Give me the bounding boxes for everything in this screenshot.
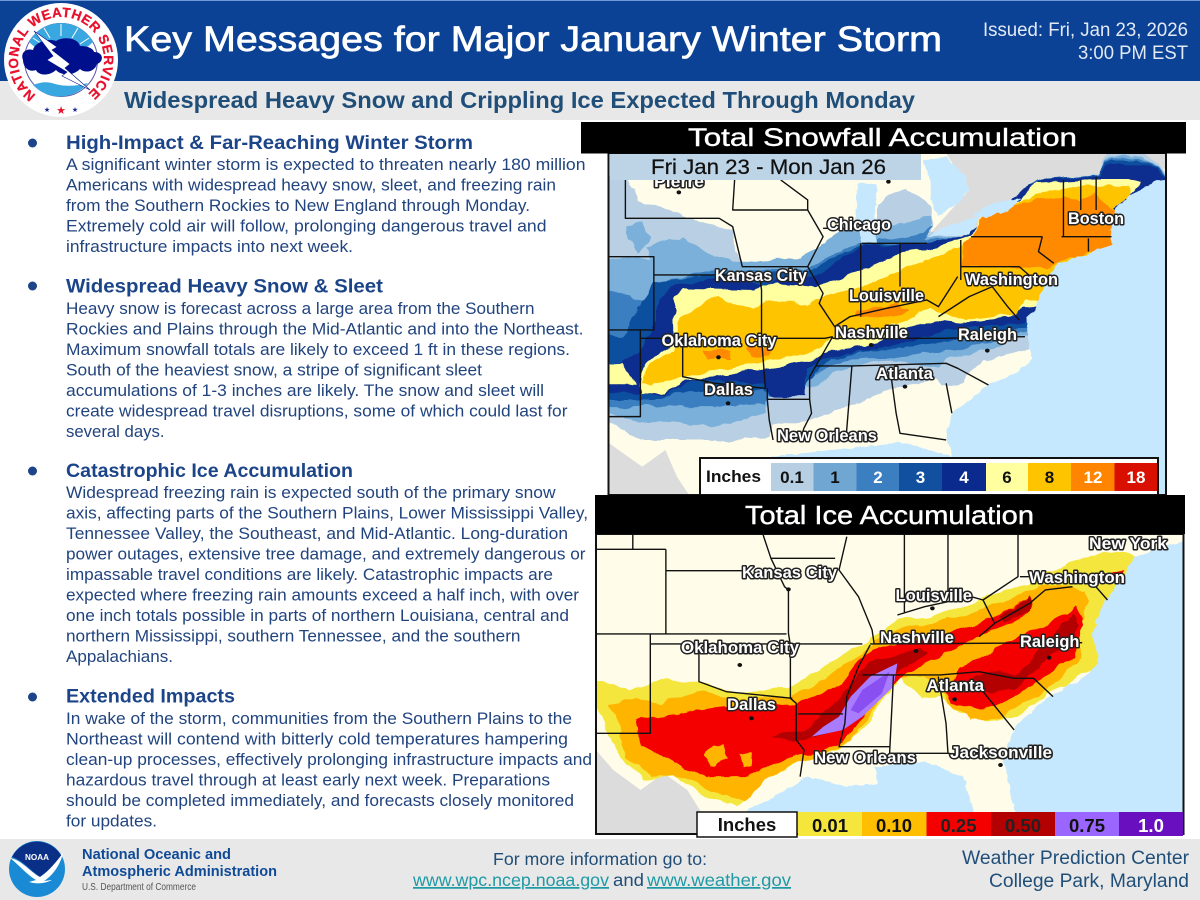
snowfall title bar xyxy=(581,122,1186,154)
section: high-impact winter storm: High-Impact & Far-Reaching Winter Storm xyxy=(66,132,473,154)
section: catastrophic ice accumulation: axis, affecting parts of the Southern Plains, Lower Mississippi Valley, xyxy=(66,504,588,522)
section: catastrophic ice accumulation: northern Mississippi, southern Tennessee, and the southern xyxy=(66,628,520,646)
section: widespread heavy snow and sleet: Maximum snowfall totals are likely to exceed 1 ft in these regions. xyxy=(66,341,570,359)
snowfall city labels: Oklahoma City xyxy=(662,332,777,350)
map frame xyxy=(608,153,1166,495)
ice city labels: Kansas City xyxy=(742,564,838,582)
snowfall legend: 12 xyxy=(1084,468,1102,487)
section: widespread heavy snow and sleet: Heavy snow is forecast across a large area from the Southern xyxy=(66,300,534,318)
snowfall legend: 3 xyxy=(916,468,925,487)
section: widespread heavy snow and sleet: several days. xyxy=(66,423,164,441)
ice legend: 1.0 xyxy=(1138,815,1164,836)
section: extended impacts: for updates. xyxy=(66,812,157,830)
icon: National Weather Service logo: ★ xyxy=(44,106,50,114)
subtitle bar xyxy=(0,81,1200,120)
ice legend: Inches xyxy=(718,814,776,835)
section: extended impacts: hazardous travel through at least early next week. Preparations xyxy=(66,772,550,790)
ice city labels: New York xyxy=(1089,535,1168,553)
Weather Prediction Center xyxy=(962,848,1190,892)
section: widespread heavy snow and sleet: South of the heaviest snow, a stripe of significant sleet xyxy=(66,362,483,380)
panel: key messages text xyxy=(28,132,592,830)
ice city labels: New Orleans xyxy=(814,749,916,767)
section: catastrophic ice accumulation: one inch totals possible in parts of northern Louisiana, central and xyxy=(66,607,569,625)
snowfall city labels: Atlanta xyxy=(876,365,934,383)
snowfall city labels: Raleigh xyxy=(958,326,1017,344)
section: extended impacts: should be completed immediately, and forecasts closely monitored xyxy=(66,792,574,810)
snowfall city labels: Dallas xyxy=(704,381,753,399)
ice legend xyxy=(697,812,1183,837)
date range box: Fri Jan 23 - Mon Jan 26 xyxy=(651,156,886,179)
section: catastrophic ice accumulation: expected where freezing rain amounts exceed a half inch, with over xyxy=(66,586,580,604)
section: catastrophic ice accumulation: Appalachians. xyxy=(66,648,173,666)
header banner xyxy=(0,0,1200,81)
issued date: 3:00 PM EST xyxy=(1078,43,1188,64)
ice city labels: Jacksonville xyxy=(950,744,1052,762)
snowfall city labels: New Orleans xyxy=(777,427,877,445)
more information links xyxy=(412,849,791,890)
section: widespread heavy snow and sleet: Rockies and Plains through the Mid-Atlantic and into the Northeast. xyxy=(66,320,584,338)
subtitle bar: Widespread Heavy Snow and Crippling Ice Expected Through Monday xyxy=(124,87,915,113)
stars: ★ xyxy=(56,105,66,117)
section: catastrophic ice accumulation: power outages, extensive tree damage, and extremely dangerous or xyxy=(66,546,586,564)
section: widespread heavy snow and sleet: Widespread Heavy Snow & Sleet xyxy=(66,276,384,298)
section: high-impact winter storm: Americans with widespread heavy snow, sleet, and freezing rain xyxy=(66,176,556,194)
Weather Prediction Center: College Park, Maryland xyxy=(989,871,1189,892)
ice city labels: Nashville xyxy=(880,629,954,647)
footer xyxy=(0,839,1200,900)
snowfall legend: 18 xyxy=(1127,468,1145,487)
issued date xyxy=(983,20,1188,64)
more information links: For more information go to: xyxy=(493,849,707,869)
section: catastrophic ice accumulation: impassable travel conditions are likely. Catastrophic impacts are xyxy=(66,566,553,584)
snowfall map artwork xyxy=(600,150,1185,507)
section: catastrophic ice accumulation: Catastrophic Ice Accumulation xyxy=(66,460,353,482)
section: widespread heavy snow and sleet: accumulations of 1-3 inches are likely. The snow and sleet will xyxy=(66,382,544,400)
icon: NOAA logo: NOAA xyxy=(25,853,49,862)
snowfall legend: 6 xyxy=(1002,468,1012,487)
section: extended impacts xyxy=(28,686,592,830)
ice map artwork xyxy=(590,533,1197,843)
ice city labels: Oklahoma City xyxy=(681,639,800,657)
section: high-impact winter storm xyxy=(28,132,586,256)
NOAA name: Atmospheric Administration xyxy=(82,864,277,880)
snowfall legend: 4 xyxy=(959,468,969,487)
snowfall legend: 2 xyxy=(873,468,883,487)
ice legend: 0.75 xyxy=(1069,815,1105,836)
snowfall legend xyxy=(700,458,1158,495)
NOAA name: U.S. Department of Commerce xyxy=(82,882,196,893)
section: widespread heavy snow and sleet: create widespread travel disruptions, some of which could last for xyxy=(66,402,568,420)
ice legend: 0.10 xyxy=(876,815,912,836)
section: extended impacts: Extended Impacts xyxy=(66,686,235,708)
NOAA name: National Oceanic and xyxy=(82,847,231,863)
section: extended impacts: clean-up processes, effectively prolonging infrastructure impacts and xyxy=(66,751,592,769)
panel: total ice map xyxy=(590,495,1197,843)
ring text: NATIONAL WEATHER SERVICE xyxy=(8,7,114,102)
snowfall legend: 8 xyxy=(1045,468,1054,487)
snowfall city labels: Nashville xyxy=(835,324,908,342)
ice legend: 0.01 xyxy=(812,815,848,836)
ice city labels: Raleigh xyxy=(1020,633,1080,651)
ice legend: 0.50 xyxy=(1005,815,1041,836)
ice city labels: Atlanta xyxy=(926,677,985,695)
section: catastrophic ice accumulation: Tennessee Valley, the Southeast, and Mid-Atlantic. Long-duration xyxy=(66,525,568,543)
section: high-impact winter storm: A significant winter storm is expected to threaten nearly 180 million xyxy=(66,156,586,174)
ice city labels xyxy=(681,535,1168,767)
section: high-impact winter storm: Extremely cold air will follow, prolonging dangerous travel and xyxy=(66,218,546,236)
NOAA name xyxy=(82,847,277,893)
ice title bar: Total Ice Accumulation xyxy=(745,500,1034,530)
icon: NOAA logo xyxy=(9,841,65,897)
section: catastrophic ice accumulation xyxy=(28,460,588,666)
ice city labels: Louisville xyxy=(896,587,972,605)
snowfall legend: 0.1 xyxy=(780,468,804,487)
section: extended impacts: Northeast will contend with bitterly cold temperatures hampering xyxy=(66,730,568,748)
snowfall legend: Inches xyxy=(706,467,761,486)
snowfall city labels: Washington xyxy=(965,271,1058,289)
section: extended impacts: In wake of the storm, communities from the Southern Plains to the xyxy=(66,710,572,728)
icon: National Weather Service logo: ★ xyxy=(72,106,78,114)
snowfall city labels: Louisville xyxy=(849,287,924,305)
more information links: and xyxy=(613,870,644,890)
snowfall legend: 1 xyxy=(830,468,840,487)
ice title bar xyxy=(595,495,1185,534)
ice city labels: Dallas xyxy=(727,696,776,714)
ice legend: 0.25 xyxy=(940,815,977,836)
more information links: www.wpc.ncep.noaa.gov xyxy=(412,870,609,890)
section: catastrophic ice accumulation: Widespread freezing rain is expected south of the primary snow xyxy=(66,484,556,502)
title: Key Messages for Major January Winter Storm xyxy=(124,19,942,59)
date range box xyxy=(610,154,921,180)
icon: National Weather Service logo xyxy=(4,3,118,117)
snowfall city labels xyxy=(662,210,1124,445)
snowfall city labels: Boston xyxy=(1068,210,1124,228)
more information links: www.weather.gov xyxy=(646,870,791,890)
section: high-impact winter storm: from the Southern Rockies to New England through Monday. xyxy=(66,197,530,215)
Weather Prediction Center: Weather Prediction Center xyxy=(962,848,1190,869)
map frame xyxy=(596,534,1184,834)
ice city labels: Washington xyxy=(1029,569,1125,587)
section: high-impact winter storm: infrastructure impacts into next week. xyxy=(66,238,353,256)
snowfall title bar: Total Snowfall Accumulation xyxy=(688,124,1077,152)
section: widespread heavy snow and sleet xyxy=(28,276,584,441)
panel: total snowfall map xyxy=(581,122,1186,507)
snowfall city labels: Chicago xyxy=(827,216,891,234)
clipped city label: Pierre: Pierre xyxy=(654,173,704,191)
issued date: Issued: Fri, Jan 23, 2026 xyxy=(983,20,1188,41)
snowfall city labels: Kansas City xyxy=(715,267,808,285)
